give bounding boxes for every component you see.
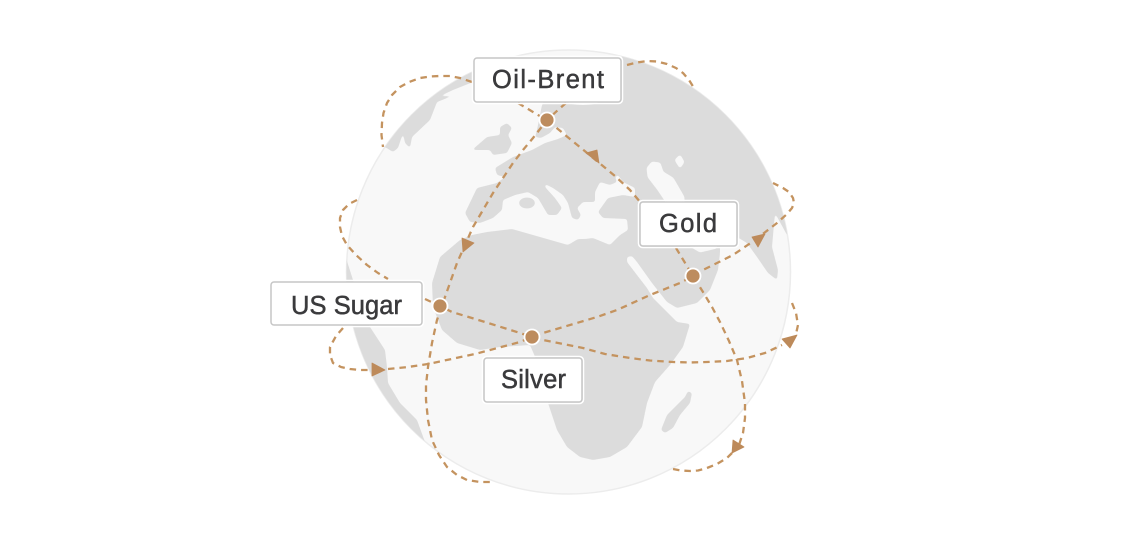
sea: Persian Gulf [693,248,716,252]
land: South America [346,262,424,440]
land: British Isles [472,123,512,155]
route: Oil-Brent far-side arc right [627,61,694,88]
arrow: head off west coast [372,363,385,376]
infographic: commodities around the globe [270,49,800,495]
route: Oil-Brent to Gold and onward [518,103,745,471]
arrow: head near Madagascar [732,440,744,453]
land: Mediterranean island [519,198,535,208]
route: Silver through Gold to India [330,183,794,376]
land: North America and Greenland [385,72,472,152]
label: Gold [638,200,738,248]
marker: US Sugar [432,298,448,314]
label: US Sugar: US Sugar [291,292,402,320]
label: US Sugar [270,280,424,326]
sea: Aral [675,155,684,168]
route: US Sugar through Silver to the east [340,200,798,362]
label: Gold: Gold [659,210,717,238]
globe [346,49,792,495]
land: Madagascar [661,391,692,433]
label: Silver: Silver [501,366,566,394]
route: Oil-Brent far-side arc left [382,76,472,147]
marker: Gold [686,268,700,284]
arrow: head off south-east edge [782,335,797,348]
land: Eurasia and Africa [432,56,787,460]
arrow: head towards India [752,234,765,247]
label: Oil-Brent [472,56,622,104]
sea: north coast patch [574,104,592,105]
route: Oil-Brent to US Sugar and south [426,103,566,482]
continents [346,56,787,460]
marker: Oil-Brent [540,112,554,128]
sea: Caspian [646,162,684,200]
label: Oil-Brent: Oil-Brent [492,66,604,94]
label: Silver [482,356,584,404]
arrow: head south-east of Oil-Brent [586,150,599,163]
arrow: head over north-west Africa [462,238,474,252]
marker: Silver [524,330,540,344]
